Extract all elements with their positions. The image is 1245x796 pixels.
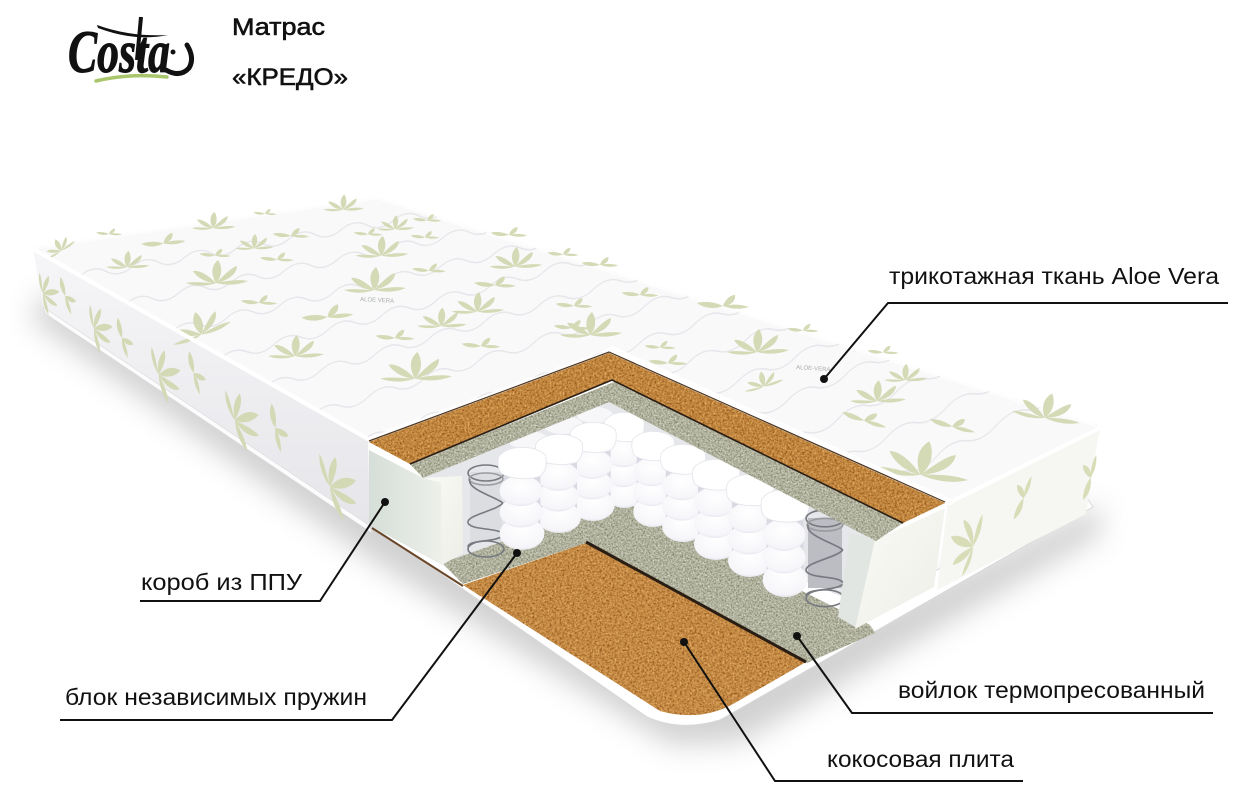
left foam block	[369, 450, 463, 565]
bottom coconut slab	[372, 528, 806, 715]
metal spring left	[468, 465, 504, 557]
right side face	[937, 427, 1101, 590]
aloe leaves pattern	[40, 195, 1084, 487]
interior back wall	[423, 402, 876, 600]
right foam block	[838, 508, 945, 629]
callout: кокосовая плита	[680, 638, 1023, 781]
pocket spring block	[498, 412, 809, 597]
callout: трикотажная ткань Aloe Vera	[820, 263, 1228, 383]
callout: кокосовая плита: кокосовая плита	[827, 746, 1015, 772]
drop shadow	[30, 290, 1100, 745]
logo: Costa: Costa	[68, 19, 170, 85]
callout: блок независимых пружин	[60, 549, 521, 720]
rear row of spring tops	[508, 407, 613, 449]
callout: войлок термопресованный	[793, 632, 1213, 713]
metal spring right	[806, 510, 844, 607]
upper coconut layer	[369, 352, 945, 523]
callout: войлок термопресованный: войлок термопресованный	[898, 677, 1205, 703]
title line: КРЕДО: «КРЕДО»	[232, 64, 348, 91]
callout: короб из ППУ: короб из ППУ	[141, 569, 303, 595]
fabric label prints: ALOE VERA	[360, 297, 394, 305]
edge piping	[33, 249, 1100, 503]
upper felt layer	[410, 382, 903, 541]
callout: трикотажная ткань Aloe Vera: трикотажная ткань Aloe Vera	[889, 263, 1220, 289]
top quilted fabric	[46, 194, 1080, 482]
fabric label prints	[360, 297, 831, 373]
callout: блок независимых пружин: блок независимых пружин	[65, 684, 367, 710]
bottom plate	[372, 495, 1093, 725]
title line: Матрас: Матрас	[232, 14, 325, 41]
left side face	[33, 248, 372, 533]
bottom felt layer	[442, 500, 875, 663]
side leaves	[38, 270, 367, 522]
mattress cutaway illustration	[30, 195, 1101, 745]
quilting lines	[82, 212, 1040, 472]
callout: короб из ППУ	[140, 498, 389, 601]
fabric label prints: ALOE-VERA	[796, 365, 831, 373]
logo swoosh	[96, 76, 167, 81]
